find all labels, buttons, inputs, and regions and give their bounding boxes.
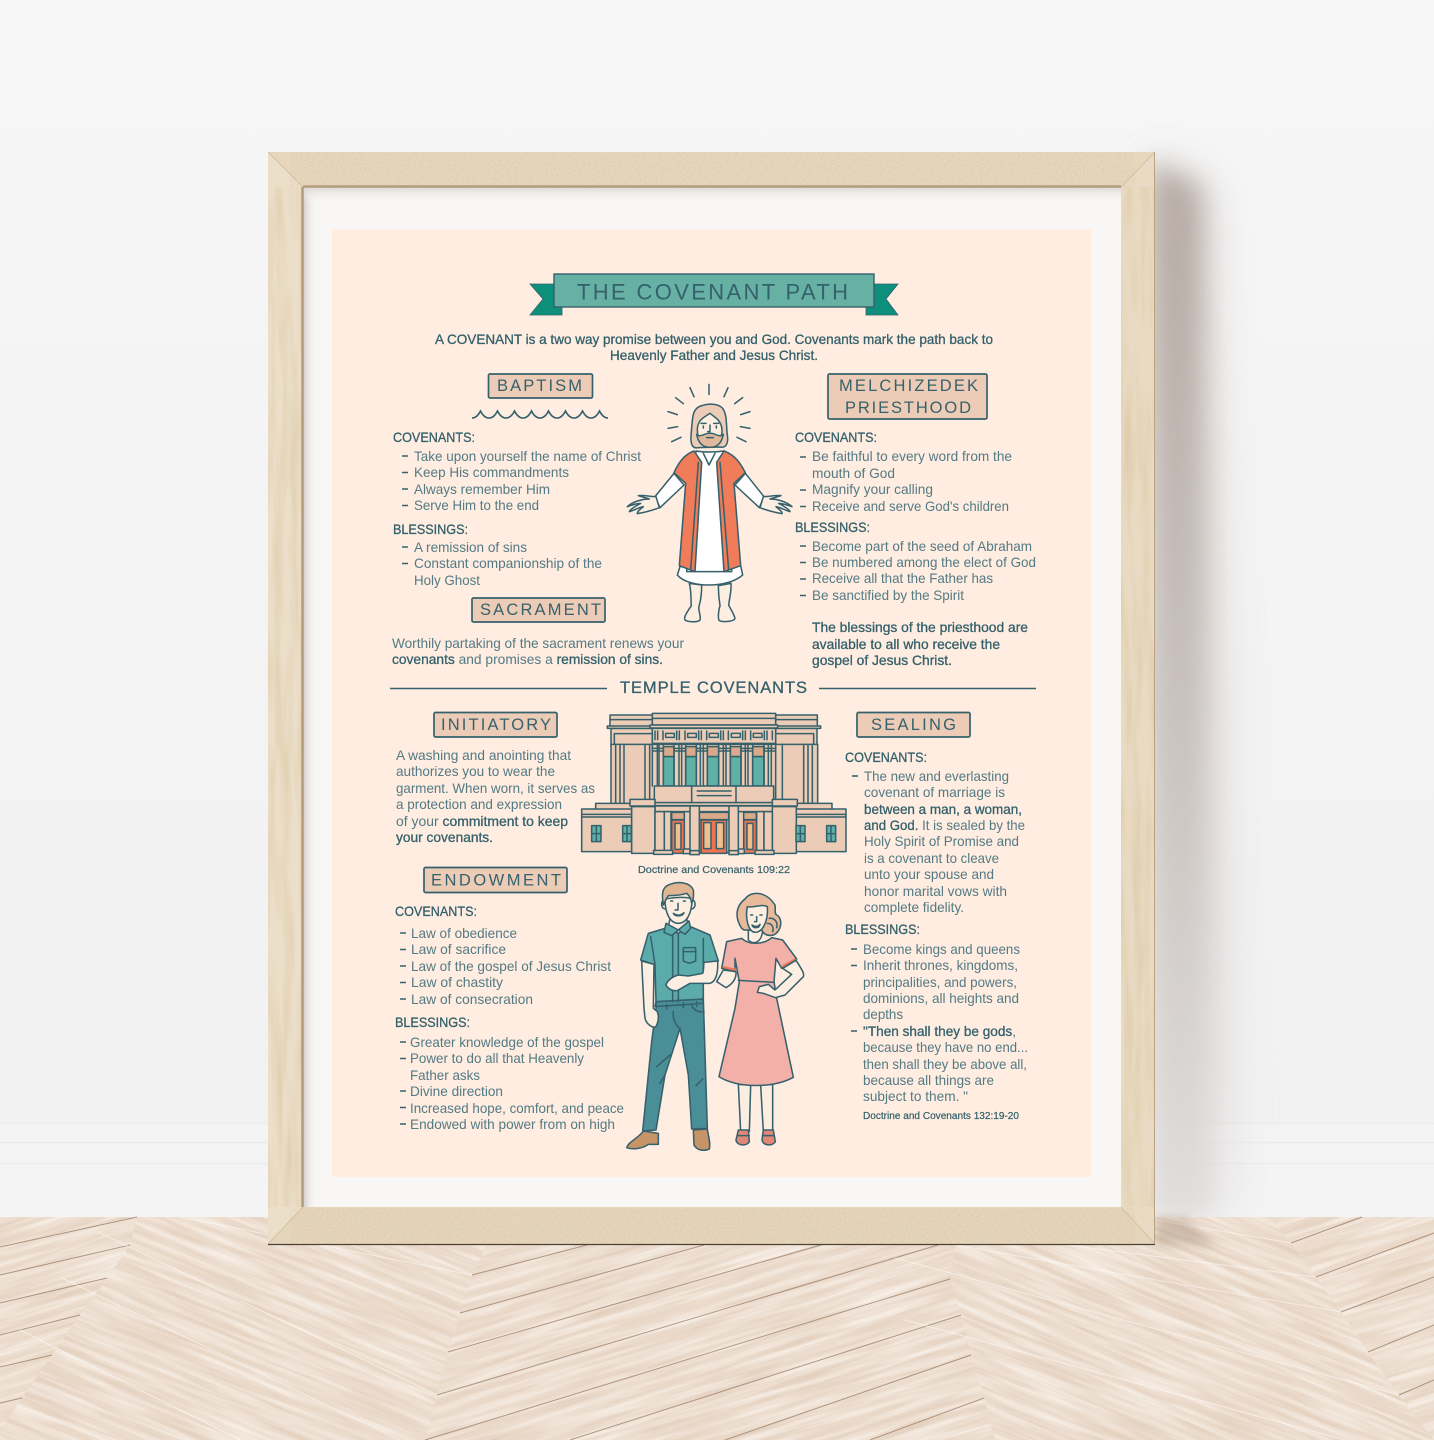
illustration: temple: [582, 713, 846, 855]
panel: endowment: [395, 868, 624, 1132]
baptism blessings: A remission of sins: [414, 539, 527, 555]
panel: sealing: [845, 712, 1028, 1122]
melchizedek covenants: [795, 429, 1012, 514]
endowment blessings: BLESSINGS:: [395, 1014, 470, 1030]
white mat: [302, 186, 1121, 1207]
endowment covenants: [395, 903, 611, 1007]
heading: baptism: BAPTISM: [497, 377, 582, 395]
sealing blessings: [845, 921, 1028, 1104]
sealing covenants: honor marital vows with: [864, 883, 1007, 899]
wooden picture frame: [268, 152, 1155, 1244]
melchizedek covenants: COVENANTS:: [795, 429, 877, 445]
priesthood note: gospel of Jesus Christ.: [812, 652, 952, 668]
sealing blessings: principalities, and powers,: [863, 974, 1017, 990]
panel: initiatory: [396, 712, 595, 845]
baptism covenants: [393, 429, 641, 513]
illustration: couple: [627, 883, 804, 1150]
intro text: Heavenly Father and Jesus Christ.: [610, 347, 818, 363]
heading: sealing: SEALING: [871, 716, 956, 734]
priesthood note: available to all who receive the: [812, 636, 1000, 652]
heading: melchizedek priesthood: PRIESTHOOD: [845, 399, 971, 417]
sealing covenants: unto your spouse and: [864, 866, 994, 882]
sealing blessings: depths: [863, 1006, 903, 1022]
initiatory text: authorizes you to wear the: [396, 763, 555, 779]
sealing blessings: because they have no end...: [863, 1039, 1028, 1055]
endowment blessings: Father asks: [410, 1067, 480, 1083]
sealing blessings: Inherit thrones, kingdoms,: [863, 957, 1018, 973]
sealing blessings: because all things are: [863, 1072, 994, 1088]
baptism blessings: Constant companionship of the: [414, 555, 602, 571]
baptism covenants: Always remember Him: [414, 481, 550, 497]
sealing covenants: between a man, a woman,: [864, 801, 1022, 817]
heading: initiatory: INITIATORY: [441, 716, 551, 734]
melchizedek blessings: Be numbered among the elect of God: [812, 554, 1036, 570]
illustration: Jesus Christ: [627, 384, 792, 622]
baptism covenants: Serve Him to the end: [414, 497, 539, 513]
sealing blessings: Become kings and queens: [863, 941, 1020, 957]
heading: endowment: [424, 868, 567, 892]
priesthood note: The blessings of the priesthood are: [812, 619, 1028, 635]
icon: light rays: [668, 384, 750, 442]
heading: sacrament: [472, 598, 605, 622]
sealing covenants: is a covenant to cleave: [864, 850, 999, 866]
endowment covenants: Law of obedience: [411, 925, 517, 941]
sealing covenants: COVENANTS:: [845, 749, 927, 765]
melchizedek blessings: BLESSINGS:: [795, 519, 870, 535]
baptism blessings: Holy Ghost: [414, 572, 480, 588]
initiatory text: your covenants.: [396, 829, 493, 845]
sealing blessings: then shall they be above all,: [863, 1056, 1027, 1072]
title banner: THE COVENANT PATH: [577, 280, 848, 304]
woman figure: [717, 893, 804, 1145]
man figure: [627, 883, 718, 1150]
baptism covenants: Take upon yourself the name of Christ: [414, 448, 641, 464]
melchizedek covenants: mouth of God: [812, 465, 895, 481]
panel: melchizedek priesthood: [795, 374, 1036, 668]
endowment blessings: Increased hope, comfort, and peace: [410, 1100, 624, 1116]
sealing covenants: Holy Spirit of Promise and: [864, 833, 1019, 849]
baptism covenants: Keep His commandments: [414, 464, 569, 480]
sealing covenants: and God. It is sealed by the: [864, 817, 1025, 833]
melchizedek covenants: Receive and serve God's children: [812, 498, 1009, 514]
title banner: [530, 274, 898, 315]
sealing covenants: The new and everlasting: [864, 768, 1009, 784]
temple scripture caption: Doctrine and Covenants 109:22: [638, 864, 790, 876]
endowment blessings: Greater knowledge of the gospel: [410, 1034, 604, 1050]
initiatory text: garment. When worn, it serves as: [396, 780, 595, 796]
heading: sacrament: SACRAMENT: [480, 601, 601, 619]
melchizedek covenants: Be faithful to every word from the: [812, 448, 1012, 464]
melchizedek covenants: Magnify your calling: [812, 481, 933, 497]
melchizedek blessings: [795, 519, 1036, 603]
icon: water waves: [472, 411, 608, 418]
intro text: A COVENANT is a two way promise between you and God. Covenants mark the path back to: [435, 331, 993, 347]
sealing blessings: "Then shall they be gods,: [863, 1023, 1016, 1039]
heading: temple covenants: TEMPLE COVENANTS: [620, 679, 807, 697]
priesthood note: [812, 619, 1028, 668]
baptism blessings: BLESSINGS:: [393, 521, 468, 537]
sacrament text: Worthily partaking of the sacrament renews your: [392, 635, 684, 651]
baptism covenants: COVENANTS:: [393, 429, 475, 445]
endowment covenants: Law of sacrifice: [411, 941, 506, 957]
sealing blessings: BLESSINGS:: [845, 921, 920, 937]
wood herringbone floor: [0, 1217, 1434, 1440]
sealing blessings: subject to them. ": [863, 1088, 968, 1104]
poster panel: [332, 229, 1091, 1177]
initiatory text: [396, 747, 595, 845]
endowment covenants: Law of the gospel of Jesus Christ: [411, 958, 611, 974]
sealing covenants: covenant of marriage is: [864, 784, 1005, 800]
sacrament text: [392, 635, 684, 667]
baptism blessings: [393, 521, 602, 588]
endowment blessings: Power to do all that Heavenly: [410, 1050, 584, 1066]
melchizedek blessings: Become part of the seed of Abraham: [812, 538, 1032, 554]
heading: baptism: [488, 374, 592, 398]
endowment blessings: Endowed with power from on high: [410, 1116, 615, 1132]
endowment covenants: Law of consecration: [411, 991, 533, 1007]
initiatory text: A washing and anointing that: [396, 747, 571, 763]
endowment covenants: COVENANTS:: [395, 903, 477, 919]
heading: endowment: ENDOWMENT: [431, 872, 561, 890]
heading: sealing: [857, 712, 970, 737]
sealing blessings: dominions, all heights and: [863, 990, 1019, 1006]
sealing covenants: [845, 749, 1025, 915]
panel: baptism: [393, 374, 641, 588]
endowment covenants: Law of chastity: [411, 974, 503, 990]
melchizedek blessings: Be sanctified by the Spirit: [812, 587, 964, 603]
sealing scripture caption: Doctrine and Covenants 132:19-20: [863, 1111, 1019, 1122]
intro text: [435, 331, 993, 363]
heading: initiatory: [434, 712, 557, 737]
heading: melchizedek priesthood: MELCHIZEDEK: [839, 377, 978, 395]
sealing covenants: complete fidelity.: [864, 899, 964, 915]
sacrament text: covenants and promises a remission of sins.: [392, 651, 663, 667]
melchizedek blessings: Receive all that the Father has: [812, 570, 993, 586]
initiatory text: of your commitment to keep: [396, 813, 568, 829]
endowment blessings: [395, 1014, 624, 1132]
frame shadow on wall: [1150, 160, 1235, 1217]
panel: sacrament: [392, 598, 684, 667]
heading: melchizedek priesthood: [828, 374, 987, 419]
initiatory text: a protection and expression: [396, 796, 562, 812]
endowment blessings: Divine direction: [410, 1083, 503, 1099]
